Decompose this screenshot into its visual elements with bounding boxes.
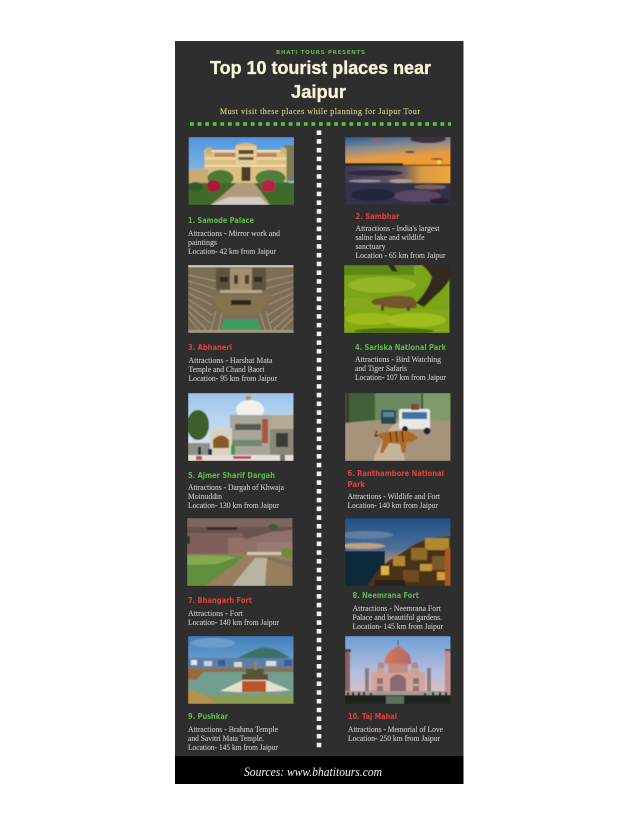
item 4: Sariska National Park: and Tiger Safaris <box>355 364 407 373</box>
item 7: Bhangarh Fort: Location- 140 km from Jaipur <box>188 618 279 627</box>
photo: Sariska leopard <box>340 265 450 334</box>
item 4: Sariska National Park: Location- 107 km from Jaipur <box>355 373 446 382</box>
item 6: Ranthambore National Park: Location- 140 km from Jaipur <box>348 501 438 510</box>
item 1: Samode Palace <box>188 216 280 256</box>
photo: Neemrana Fort <box>341 518 451 586</box>
item 4: Sariska National Park: Attractions - Bird Watching <box>355 355 441 364</box>
eyebrow: Bhati Tours presents: BHATI TOURS PRESENTS <box>276 50 365 56</box>
item 8: Neemrana Fort: Attractions - Neemrana Fort <box>352 604 442 613</box>
photo: Abhaneri stepwell <box>188 265 294 333</box>
item 8: Neemrana Fort: Palace and beautiful gardens. <box>352 613 442 622</box>
item 7: Bhangarh Fort: 7. Bhangarh Fort <box>188 596 252 605</box>
item 7: Bhangarh Fort <box>188 596 279 627</box>
item 4: Sariska National Park <box>355 343 447 382</box>
item 9: Pushkar: and Savitri Mata Temple. <box>188 734 264 743</box>
item 9: Pushkar: Location- 145 km from Jaipur <box>188 743 278 752</box>
item 8: Neemrana Fort: 8. Neemrana Fort <box>352 591 419 600</box>
item 8: Neemrana Fort <box>352 591 443 631</box>
item 5: Ajmer Sharif Dargah: Moinuddin <box>188 492 222 501</box>
item 6: Ranthambore National Park: Park <box>348 480 366 489</box>
item 6: Ranthambore National Park <box>348 469 444 510</box>
item 8: Neemrana Fort: Location- 145 km from Jaipur <box>352 622 443 631</box>
item 5: Ajmer Sharif Dargah: Attractions - Dargah of Khwaja <box>188 483 284 492</box>
item 6: Ranthambore National Park: Attractions - Wildlife and Fort <box>348 492 441 501</box>
photo: Sambhar lake <box>345 135 451 205</box>
item 7: Bhangarh Fort: Attractions - Fort <box>188 609 244 618</box>
photo: Bhangarh Fort <box>187 518 293 586</box>
photo: Samode Palace <box>188 137 294 205</box>
photo: Taj Mahal <box>344 636 452 704</box>
title: Top 10 tourist places near <box>210 58 431 78</box>
item 4: Sariska National Park: 4. Sariska National Park <box>355 343 447 352</box>
item 5: Ajmer Sharif Dargah <box>188 471 284 510</box>
item 2: Sambhar: saline lake and wildlife <box>356 233 425 242</box>
footer: sources bar: Sources: www.bhatitours.com <box>244 764 382 779</box>
photo: Ranthambore tiger <box>345 393 451 461</box>
item 10: Taj Mahal <box>348 712 443 743</box>
item 2: Sambhar <box>356 212 446 260</box>
photo: Ajmer Sharif Dargah <box>187 393 294 461</box>
item 1: Samode Palace: Attractions - Mirror work and <box>188 229 280 238</box>
subtitle: Must visit these places while planning for Jaipur Tour <box>220 107 420 116</box>
item 5: Ajmer Sharif Dargah: Location- 130 km from Jaipur <box>188 501 279 510</box>
item 3: Abhaneri: Temple and Chand Baori <box>188 365 265 374</box>
item 2: Sambhar: Attractions - India's largest <box>356 224 440 233</box>
item 3: Abhaneri: Location- 95 km from Jaipur <box>188 374 277 383</box>
item 2: Sambhar: sanctuary <box>356 242 386 251</box>
footer: sources bar <box>175 756 464 784</box>
poster panel <box>175 41 464 784</box>
item 1: Samode Palace: 1. Samode Palace <box>188 216 254 225</box>
item 1: Samode Palace: Location- 42 km from Jaipur <box>188 247 276 256</box>
item 3: Abhaneri: 3. Abhaneri <box>188 343 232 352</box>
item 10: Taj Mahal: Location- 250 km from Jaipur <box>348 734 440 743</box>
item 2: Sambhar: Location - 65 km from Jaipur <box>356 251 446 260</box>
photo: Pushkar <box>188 636 294 704</box>
item 9: Pushkar: 9. Pushkar <box>188 712 228 721</box>
item 9: Pushkar: Attractions - Brahma Temple <box>188 725 278 734</box>
item 5: Ajmer Sharif Dargah: 5. Ajmer Sharif Dargah <box>188 471 275 480</box>
item 9: Pushkar <box>188 712 278 752</box>
item 10: Taj Mahal: Attractions - Memorial of Love <box>348 725 443 734</box>
title <box>210 58 431 102</box>
item 1: Samode Palace: paintings <box>188 238 217 247</box>
title: Jaipur <box>291 82 346 102</box>
item 3: Abhaneri: Attractions - Harshat Mata <box>188 356 273 365</box>
item 2: Sambhar: 2. Sambhar <box>356 212 400 221</box>
item 6: Ranthambore National Park: 6. Ranthambore National <box>348 469 444 478</box>
item 3: Abhaneri <box>188 343 277 383</box>
item 10: Taj Mahal: 10. Taj Mahal <box>348 712 397 721</box>
